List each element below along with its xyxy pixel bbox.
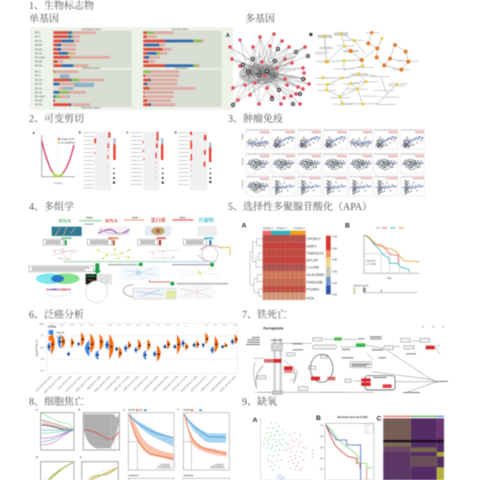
panel: single gene oncoprint: Liver cancer [175, 67, 188, 70]
grid [47, 336, 237, 359]
survival y axis: 0.8 [320, 436, 324, 438]
KM annotations: p = 0.035 [366, 264, 376, 266]
panel: single gene oncoprint: BIT-B5 [35, 62, 43, 64]
heatmap rows [263, 235, 306, 300]
panel: multi-omics flow [29, 217, 230, 303]
tSNE red cluster [287, 433, 306, 470]
network thumbnails [52, 248, 180, 260]
panel label B: B [316, 415, 321, 422]
venn diagram [36, 273, 80, 284]
orange violins [51, 332, 238, 362]
panel: APA heatmap [242, 222, 419, 300]
survival title: Survival curve (p<0.001) [337, 415, 368, 419]
cluster labels [263, 226, 305, 230]
gene labels: EMP1 [307, 244, 317, 248]
panel: single gene oncoprint: BIT-B5 [35, 101, 43, 103]
panel: single gene oncoprint: BIT-2 [35, 37, 41, 39]
cluster bar [383, 416, 444, 417]
panel: single gene oncoprint: Stomach cancer [172, 28, 189, 31]
glutathione cycle ring [310, 354, 333, 382]
y axis labels: CTLA4 [240, 180, 244, 188]
heatmap thumbnail [86, 274, 112, 284]
median markers [49, 339, 237, 355]
panel label B [309, 33, 312, 36]
scale numbers: 1 [443, 325, 445, 329]
cluster labels: Cluster 2 [276, 226, 287, 230]
dot plot c [126, 130, 164, 190]
panel labels: f [178, 408, 179, 412]
heading: 5 APA: 5、选择性多聚腺苷酸化（APA） [228, 200, 372, 213]
rotated tissue labels: LIHC (N=50,T=374) [133, 376, 149, 392]
panel: single gene oncoprint: BIT-B3 [35, 45, 43, 47]
panel label a: a [33, 131, 36, 135]
rotated tissue labels: LUAD (N=59,T=535) [142, 375, 159, 392]
legend: Tumor [57, 336, 64, 339]
omics titles: DNA [59, 218, 72, 224]
y axis: 2.5 [41, 359, 45, 361]
heading: 6 pan-cancer: 6、泛癌分析 [29, 308, 84, 321]
panel: single gene oncoprint: BIT-A6 [35, 91, 43, 94]
dot plot c: c [126, 130, 128, 134]
cluster labels: Cluster 1 [263, 226, 274, 230]
gene labels: HCK [307, 296, 315, 300]
gene labels: CRTAC1 [307, 237, 321, 241]
rotated tissue labels: KIRP (N=32,T=289) [123, 376, 140, 392]
lower right network [177, 285, 215, 299]
volcano plot [42, 135, 75, 185]
green down arrow [93, 263, 101, 274]
legend: Normal [57, 331, 65, 334]
panel label A: A [226, 33, 230, 39]
panel: single gene oncoprint: Pancreatic cancer [82, 107, 101, 110]
panel: single gene oncoprint: BIT-A1 [35, 40, 43, 43]
panel: tumor immunity scatter grid [240, 129, 424, 196]
panel: single gene oncoprint [30, 27, 233, 110]
blue violins [47, 334, 233, 360]
metabolite ring [198, 245, 230, 262]
significance marks [50, 325, 237, 326]
upregulated red boxes [273, 346, 435, 388]
scatter row 3 [246, 176, 424, 196]
LPCAT left loop [256, 366, 263, 388]
heading: 4 multi-omics: 4、多组学 [29, 200, 74, 213]
network thumb dots [54, 248, 174, 259]
KM annotations [366, 260, 392, 280]
gene labels: PGAM2 [307, 287, 319, 291]
panel: pathway network B [309, 31, 418, 105]
heading: 2 alternative splicing: 2、可变剪切 [29, 112, 84, 125]
heading: 8 pyroptosis: 8、细胞焦亡 [29, 395, 84, 408]
omics images [52, 227, 82, 236]
risk table [353, 284, 417, 294]
y axis labels: TIM3 [240, 133, 244, 140]
panel labels: d [36, 455, 38, 459]
rotated tissue labels: PAAD (N=4,T=178) [163, 375, 179, 392]
panel: alternative splicing [33, 130, 211, 190]
rotated tissue labels [35, 375, 237, 394]
color scale: 0.60 [332, 258, 338, 262]
panel: single gene oncoprint: BIT-D3 [35, 66, 43, 68]
y axis: 5.0 [41, 347, 45, 349]
gene labels: HLA-DRB1 [307, 273, 325, 277]
metabolite image [198, 226, 217, 236]
KM legend [376, 227, 404, 228]
panel labels: c [123, 409, 125, 412]
y axis labels: LAG3 [240, 158, 244, 165]
KM annotations: Log-rank [366, 260, 376, 263]
heading: 9 hypoxia: 9、缺氧 [242, 395, 277, 408]
omics titles [59, 217, 214, 224]
volcano plot: No significant [61, 142, 75, 145]
panel labels: b [79, 408, 81, 412]
cluster labels: Cluster 3 [294, 226, 305, 230]
dot plot b: b [79, 130, 82, 134]
panel: single gene oncoprint: BIT-A4 [35, 87, 43, 90]
integration lines [63, 260, 166, 263]
omics sub labels [62, 237, 213, 239]
red bracket [149, 280, 170, 282]
lower label [170, 282, 228, 286]
lower pathway panel [133, 288, 176, 299]
rotated tissue labels: UCEC (N=35,T=552) [220, 376, 237, 393]
moderately upregulated boxes [264, 359, 335, 380]
survival legend [365, 424, 373, 434]
KM stats c [157, 464, 172, 468]
integration text box [29, 266, 93, 272]
tSNE green cluster [264, 423, 286, 470]
rotated tissue labels: READ (N=10,T=167) [190, 375, 208, 393]
panel: single gene oncoprint: BIT-D3 [35, 105, 43, 107]
panel: single gene oncoprint: BIT-A6ST [35, 96, 46, 99]
panel: single gene oncoprint: BIT-D1 [35, 80, 43, 82]
panel labels [36, 408, 179, 459]
orange nodes [349, 31, 410, 72]
rotated tissue labels: HNSC (N=44,T=502) [95, 376, 112, 393]
rotated tissue labels: KIRC (N=72,T=535) [114, 376, 130, 392]
panel label A: A [253, 417, 258, 424]
survival plot [325, 423, 374, 480]
scale numbers [422, 325, 445, 329]
colored indicator bars [65, 240, 211, 245]
heading: 1 biomarkers: 1、生物标志物 [29, 0, 94, 12]
rotated tissue labels: THCA (N=59,T=510) [210, 375, 228, 392]
KM survival chart [364, 235, 419, 273]
heading: 3 tumor immunity: 3、肿瘤免疫 [228, 112, 283, 125]
scale numbers: 0 [432, 325, 434, 329]
gene labels: TMEM119 [307, 251, 323, 255]
survival y axis: 1.0 [320, 425, 324, 427]
risk table c [128, 475, 174, 480]
rotated tissue labels: LUSC (N=49,T=502) [153, 376, 169, 392]
panel: ferroptosis pathway [246, 325, 448, 394]
analysis box text [46, 241, 203, 244]
panel: pyroptosis [36, 408, 229, 480]
panel: single gene oncoprint: BIT-A3 [35, 83, 43, 86]
panel: single gene oncoprint: BIT-2 [35, 76, 41, 78]
rotated tissue labels: BRCA (N=113,T=1109) [43, 375, 63, 394]
legend: Group [48, 324, 57, 328]
GPX4 loop [293, 370, 295, 383]
dendrogram [250, 239, 263, 296]
panel labels: a [36, 409, 38, 412]
KM annotations: Day [387, 278, 392, 280]
KM legend c [128, 409, 147, 411]
panel: single gene oncoprint: BIT-A4 [35, 52, 43, 55]
ROC plot left [41, 462, 74, 480]
heading: 7 ferroptosis: 7、铁死亡 [242, 308, 287, 321]
rotated tissue labels: CHOL (N=9,T=36) [58, 376, 73, 391]
legend [48, 324, 65, 341]
rotated tissue labels: PCPG (N=3,T=179) [172, 376, 188, 392]
y axis: 7.5 [41, 336, 45, 338]
network hub nodes [232, 48, 310, 106]
gene labels [307, 237, 325, 300]
yellow nodes [321, 32, 398, 105]
colored bar strip [45, 289, 72, 297]
y axis: 10.0 [39, 324, 45, 326]
y axis: log2(TPM+1) [34, 339, 38, 357]
tSNE legend [312, 450, 314, 458]
omics titles: RNA [105, 218, 119, 224]
pathway label smears [315, 32, 418, 105]
rotated tissue labels: STAD (N=32,T=375) [200, 375, 218, 392]
panel: single gene oncoprint: Colorectal cancer [82, 67, 100, 70]
scatter row 2 [246, 153, 424, 173]
rotated tissue labels: PRAD (N=52,T=499) [181, 375, 198, 393]
color scale: 0.00 [332, 292, 338, 296]
survival y axis: 0.2 [320, 469, 324, 471]
color scale: 1.00 [332, 234, 338, 238]
volcano plot: U-value [54, 183, 63, 185]
panel: gene interaction network A [226, 32, 311, 107]
risk table: Number at risk [353, 284, 369, 287]
panel label B: B [345, 222, 350, 229]
heading: multi gene: 多基因 [245, 12, 275, 25]
rotated tissue labels: COAD (N=41,T=480) [65, 375, 83, 393]
blue integration line [166, 260, 217, 263]
panel: pan-cancer violins [34, 323, 238, 394]
integration row labels [108, 263, 214, 267]
y axis: 0.0 [41, 371, 45, 373]
downregulated green boxes [334, 337, 365, 347]
y axis labels [240, 133, 244, 188]
color scale: 0.20 [332, 281, 338, 285]
omics titles: 蛋白质 [151, 217, 166, 224]
lower ring [123, 285, 133, 297]
survival y axis: 0.4 [320, 458, 324, 460]
protein image [145, 226, 171, 236]
gene labels: ATCAY [307, 259, 319, 263]
dot plot b [79, 130, 116, 190]
gene labels: FAM163B [307, 280, 323, 284]
plot frame [47, 323, 237, 373]
volcano plot: Pvalue<0.05 [61, 138, 75, 141]
color scale: 0.80 [332, 246, 338, 250]
network dense core [239, 64, 279, 84]
grey pathway boxes [257, 338, 429, 394]
color scale: 0.40 [332, 269, 338, 273]
LASSO coefficient plot [41, 413, 74, 450]
tSNE axis [261, 418, 310, 480]
pathway edges [323, 33, 408, 104]
tSNE blue cluster [277, 475, 284, 479]
panel labels: e [80, 456, 82, 459]
dot plot d [174, 130, 211, 190]
rotated tissue labels: BLCA (N=19,T=408) [35, 375, 53, 392]
panel: single gene oncoprint: BIT-A6ST [35, 56, 46, 59]
pathway connectors [253, 339, 440, 392]
rotated tissue labels: GBM (N=5,T=169) [87, 376, 102, 391]
network nodes [228, 32, 311, 106]
LASSO CV plot [83, 413, 119, 450]
panel: single gene oncoprint: Esophageal cancer [82, 28, 102, 31]
pathway title: Ferroptosis [263, 326, 283, 330]
cluster bar [263, 231, 306, 235]
rna image [98, 227, 130, 236]
circular plot [86, 281, 108, 303]
gene labels: L1CAM [307, 266, 319, 270]
omics arrows [79, 218, 193, 223]
risk table f [183, 475, 229, 480]
mitochondria box [365, 376, 395, 390]
omics titles: 代谢物 [199, 217, 214, 224]
panel: single gene oncoprint: BIT-B4 [35, 49, 43, 51]
KM stats f [183, 409, 225, 468]
expression heatmap [383, 418, 444, 480]
analysis boxes [43, 239, 207, 245]
color scale [326, 234, 338, 296]
panel: single gene oncoprint: BIT-1 [35, 33, 41, 35]
KM curve high low f [183, 413, 229, 470]
scatter row 1 [246, 129, 424, 149]
survival y axis [320, 425, 324, 471]
ROC plot right [82, 462, 118, 480]
net thumbnail right [177, 267, 220, 279]
heading: single gene: 单基因 [29, 12, 59, 25]
panel: hypoxia [253, 415, 444, 480]
arrow labels [84, 217, 185, 225]
dot plot d: d [174, 130, 177, 134]
panel label A: A [242, 222, 247, 229]
rotated tissue labels: ESCA (N=11,T=162) [75, 375, 93, 392]
panel: single gene oncoprint: BIT-1 [35, 72, 41, 74]
net thumbnail mid [120, 266, 160, 280]
KM curve high low c [128, 413, 174, 470]
panel label C: C [377, 416, 382, 423]
y axis [34, 324, 45, 373]
network edges [230, 34, 309, 105]
rotated tissue labels: KICH (N=25,T=65) [106, 376, 121, 391]
scale numbers: -1 [422, 325, 425, 329]
left lipids label [246, 336, 448, 393]
survival y axis: 0.6 [320, 447, 324, 449]
membrane lines [274, 338, 281, 393]
